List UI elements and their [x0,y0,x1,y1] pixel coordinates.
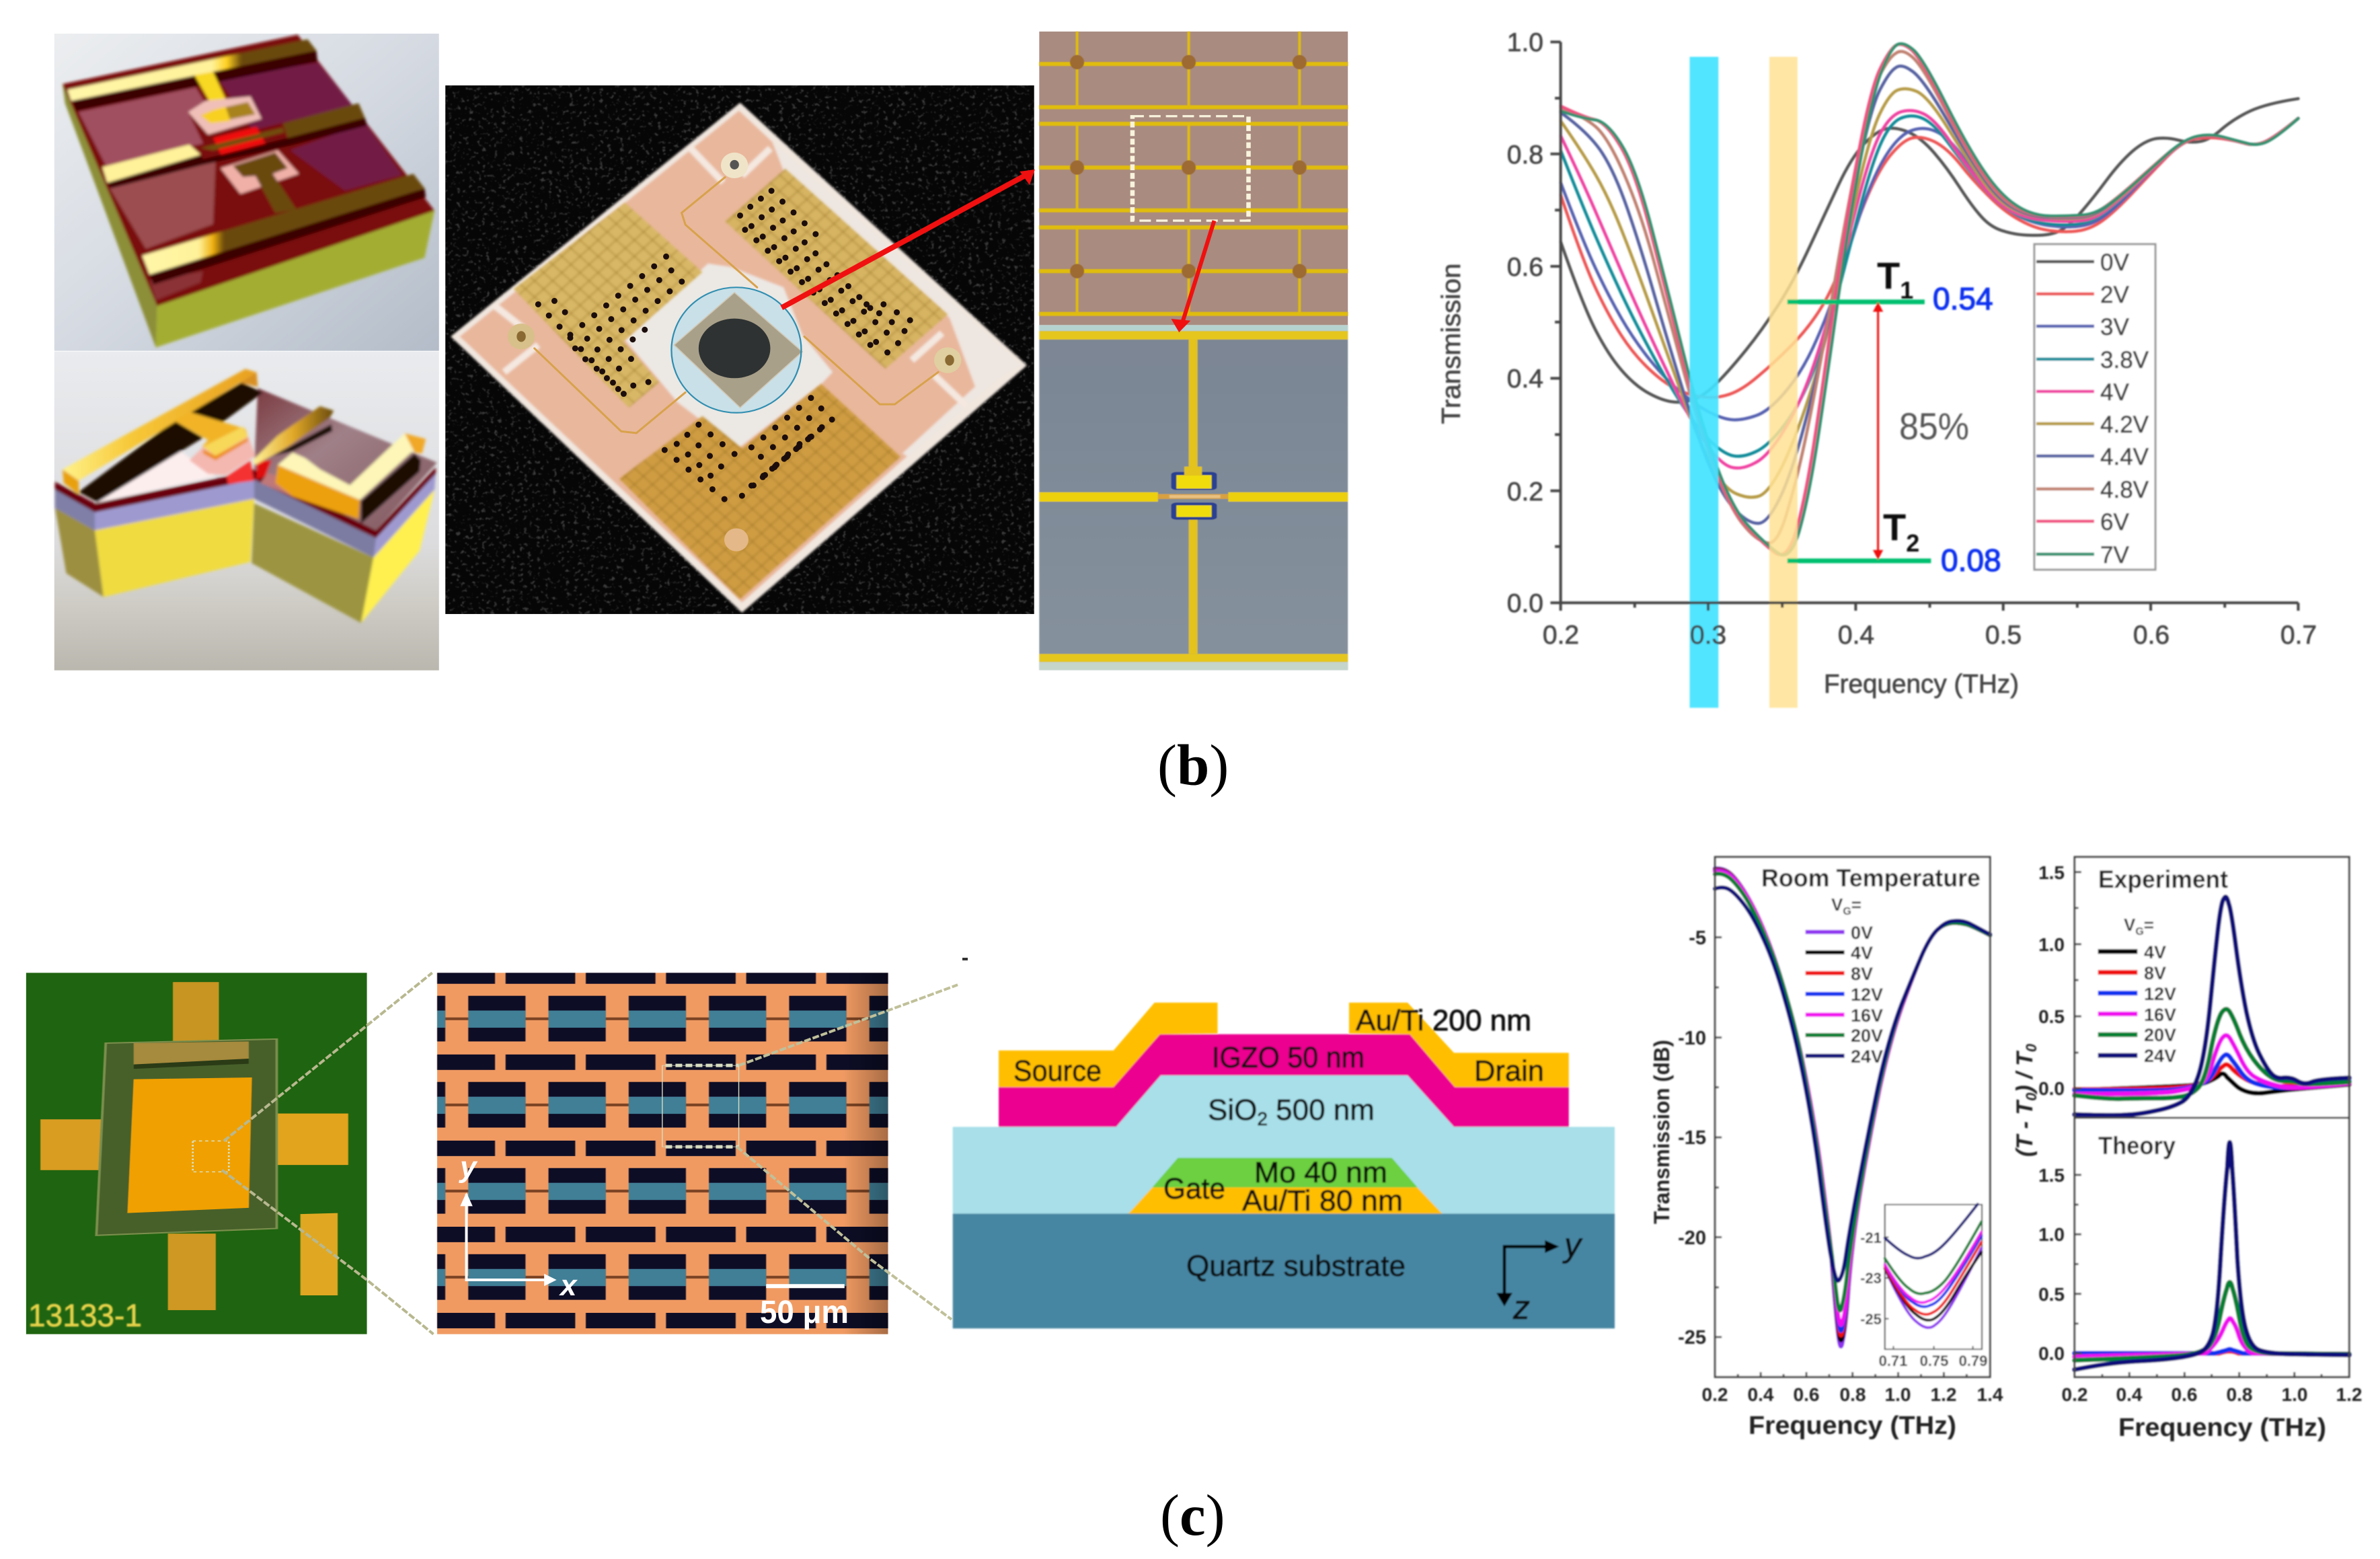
highlight band: yellow [1769,56,1798,708]
y axis title: ) / T [2012,1050,2038,1095]
label T2: T [1883,506,1906,548]
y axis title: Transmission (dB) [1650,1040,1674,1224]
y axis title: 0 [2023,1043,2040,1052]
legend labels: 16V [2144,1005,2176,1025]
x tick labels: 1.2 [1931,1384,1956,1405]
printed circuit board [451,103,1027,613]
x tick labels [1702,1384,2003,1405]
theory curves [2075,1142,2349,1369]
gate: Mo layer [1152,1157,1418,1187]
chip label: 13133-1 [28,1297,142,1333]
y tick labels [2038,862,2065,1364]
legend labels: 12V [1851,985,1883,1005]
curve: 7V [1561,44,2298,555]
label: Quartz substrate: Quartz substrate [1186,1250,1406,1283]
legend labels [2144,942,2176,1066]
legend: voltages: 4.2V [2100,412,2149,438]
x tick labels: 0.4 [1748,1384,1774,1405]
axis label y: y [459,1151,478,1184]
y tick labels: 0.5 [2038,1284,2065,1305]
plot frame and ticks [1715,857,1990,1377]
y tick labels: 0.0 [2038,1078,2065,1099]
x tick labels: 0.2 [1702,1384,1728,1405]
legend labels: 24V [1851,1047,1883,1067]
axis label y: y [1562,1226,1583,1264]
label: Mo 40 nm: Mo 40 nm [1254,1156,1387,1189]
label: Source: Source [1013,1055,1102,1088]
y tick labels: -15 [1678,1127,1706,1149]
y axis title: Transmission [1437,264,1466,424]
marker lines T1 and T2 [1788,302,1931,561]
arrow: chip to metamaterial array [781,169,1035,308]
panel: micrograph of metamaterial array [1039,32,1348,325]
curve: 4.2V [1561,89,2298,497]
legend: voltages: 0V [2100,250,2129,276]
legend labels: 12V [2144,984,2176,1004]
legend labels: 24V [2144,1046,2176,1066]
curve: 2V [1561,118,2298,397]
panel: device cross-section schematic [953,1003,1615,1328]
heading: Theory: Theory [2098,1132,2176,1159]
y axis tick labels: 0.0 [1507,589,1543,618]
x axis tick labels: 0.2 [1543,621,1579,650]
legend title VG: = [2144,915,2154,935]
y axis tick labels: 1.0 [1507,28,1543,57]
highlight band: cyan [1689,56,1718,708]
x tick labels: 1.0 [2282,1384,2307,1405]
x tick labels: 0.4 [2116,1384,2143,1405]
gold bias traces and contacts [508,153,961,552]
panel: micrograph of slot array [437,973,958,1334]
label T1: T [1877,254,1900,297]
y axis title: (T - T [2012,1101,2038,1157]
label 85 percent: 85% [1899,405,1969,447]
arrow: 85 percent modulation depth [1873,302,1883,560]
experiment curves [2075,897,2349,1115]
chart: transmission versus frequency [1437,28,2317,708]
legend: voltages: 2V [2100,282,2129,308]
heading: Room Temperature: Room Temperature [1761,864,1981,892]
curve: 6V [1561,44,2298,555]
zoom guide lines [222,973,434,1334]
label T1: 1 [1900,276,1913,304]
dotted zoom region [193,1141,229,1172]
x tick labels: 0.6 [2172,1384,2197,1405]
y tick labels: -25 [1678,1327,1706,1348]
curve: 4.4V [1561,66,2298,523]
y axis tick labels: 0.6 [1507,253,1543,282]
small dark mark [962,958,968,960]
x axis title: Frequency (THz) [1824,670,2019,699]
frames and ticks [2075,857,2349,1377]
legend line swatches [1806,932,1845,1056]
zoom guide lines to schematic [737,985,958,1320]
curves for gate voltages [1715,868,1990,1346]
curve: 3V [1561,118,2298,420]
legend: voltages: 3V [2100,314,2129,340]
panel: 3D device model, top view [54,34,439,351]
x axis title: Frequency (THz) [1749,1412,1956,1440]
panel: photograph of fabricated device [26,973,434,1334]
legend: voltages: 4V [2100,379,2129,406]
legend: voltages: 3.8V [2100,347,2149,373]
panel: photograph of packaged modulator chip [445,85,1035,614]
y tick labels: 0.0 [2038,1343,2065,1364]
y tick labels: -5 [1689,927,1706,949]
value 0.08: 0.08 [1941,543,2001,578]
source electrode [999,1003,1217,1087]
x axis tick labels: 0.7 [2280,621,2317,650]
y tick labels: 1.5 [2038,1165,2065,1186]
dashed selection box [1133,116,1249,221]
legend: voltages: 4.8V [2100,477,2149,503]
axes [1550,42,2298,611]
legend labels: 16V [1851,1005,1883,1026]
x tick labels: 1.2 [2336,1384,2362,1405]
curve: 0V [1561,99,2298,402]
inset: zoom of resonance dip [1885,1204,1982,1349]
x axis tick labels: 0.4 [1838,621,1874,650]
legend title VG: V [2124,915,2135,935]
y tick labels: 1.0 [2038,1224,2065,1245]
caption (c): (c) [1160,1482,1225,1548]
panel: micrograph of single unit cell [1039,325,1348,670]
y axis title: 0 [2023,1092,2040,1101]
y axis tick labels [1507,28,1543,618]
legend title VG: = [1851,895,1861,915]
photo background [445,85,1034,614]
scale bar [766,1284,845,1288]
x tick labels: 0.6 [1794,1384,1819,1405]
label: SiO2 500 nm: 2 [1257,1108,1268,1129]
x tick labels: 0.2 [2062,1384,2087,1405]
x tick labels [2062,1384,2362,1405]
legend: voltages [2034,244,2155,570]
inset tick labels [1860,1229,1987,1369]
legend title VG: G [1843,906,1851,917]
x axis tick labels: 0.6 [2133,621,2170,650]
x tick labels: 1.0 [1885,1384,1911,1405]
chart: room temperature transmission [1650,857,2003,1440]
x axis tick labels: 0.3 [1690,621,1726,650]
x tick labels: 1.4 [1977,1384,2003,1405]
y tick labels: 0.5 [2038,1006,2065,1027]
legend labels: 20V [1851,1026,1883,1046]
y axis tick labels: 0.8 [1507,141,1543,169]
heading: Experiment: Experiment [2098,866,2228,893]
value 0.54: 0.54 [1933,281,1993,316]
y tick labels: -20 [1678,1227,1706,1249]
scale label: 50 μm [760,1295,849,1330]
legend labels: 8V [2144,963,2166,983]
axis arrows [460,1192,557,1286]
legend title VG: V [1831,895,1843,915]
x axis tick labels [1543,621,2317,650]
panel: 3D device model, cut-away view [54,352,439,671]
label: Gate: Gate [1163,1172,1225,1205]
legend labels: 20V [2144,1025,2176,1045]
curve: 4.8V [1561,51,2298,543]
layer: IGZO [999,1034,1569,1127]
legend: voltages: 7V [2100,542,2129,568]
dashed zoom region [662,1065,739,1147]
label: Au/Ti 200 nm: Au/Ti 200 nm [1356,1004,1531,1037]
label: IGZO 50 nm: IGZO 50 nm [1212,1041,1365,1074]
y axis tick labels: 0.4 [1507,365,1543,393]
y axis tick labels: 0.2 [1507,478,1543,506]
inset tick labels: -23 [1860,1270,1882,1287]
x tick labels: 0.8 [1840,1384,1866,1405]
coordinate axes [1496,1240,1560,1307]
legend: voltages: 4.4V [2100,444,2149,470]
y tick labels: -10 [1678,1028,1706,1049]
legend title VG: G [2135,926,2144,938]
label T2: 2 [1906,529,1919,557]
label: Au/Ti 80 nm: Au/Ti 80 nm [1242,1184,1403,1217]
axis label z: z [1512,1289,1530,1326]
y tick labels: 1.5 [2038,862,2065,883]
y tick labels: 1.0 [2038,934,2065,955]
inset tick labels: -21 [1860,1229,1882,1246]
caption (b): (b) [1157,732,1229,798]
chip with highlight circle [671,287,802,413]
legend labels: 4V [1851,943,1873,963]
x tick labels: 0.8 [2227,1384,2252,1405]
inset tick labels: 0.79 [1959,1353,1987,1369]
x axis tick labels: 0.5 [1985,621,2022,650]
legend line swatches [2098,952,2137,1055]
legend labels: 4V [2144,942,2166,962]
plot lines and highlight bands [1550,42,2298,708]
curve: 3.8V [1561,116,2298,456]
label: Drain: Drain [1474,1055,1544,1088]
legend labels: 0V [1851,923,1873,943]
inset tick labels: 0.75 [1920,1353,1948,1369]
gold bias pads with via holes [514,169,948,599]
x axis title: Frequency (THz) [2118,1414,2326,1442]
chart: experiment and theory differential transmission [2012,857,2362,1442]
y tick labels [1678,927,1706,1348]
layer: quartz substrate [953,1214,1615,1328]
label: SiO2 500 nm: SiO [1208,1094,1257,1127]
drain electrode [1349,1003,1569,1087]
inset tick labels: -25 [1860,1311,1882,1328]
legend labels [1851,923,1883,1067]
layer: SiO2 dielectric [953,1075,1615,1214]
legend labels: 8V [1851,964,1873,984]
label: SiO2 500 nm: 500 nm [1268,1094,1375,1127]
legend: voltages: 6V [2100,509,2129,535]
arrow: array to unit cell [1171,221,1215,332]
curve: 4V [1561,110,2298,468]
axis label x: x [559,1269,578,1302]
gate: Au/Ti layer [1128,1187,1443,1214]
inset tick labels: 0.71 [1879,1353,1907,1369]
